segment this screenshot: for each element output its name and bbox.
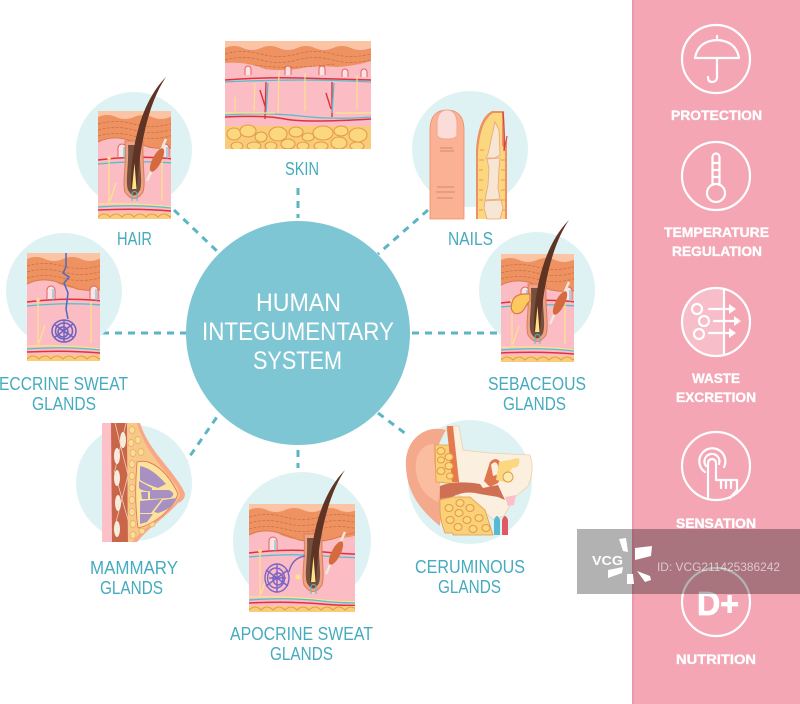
- icon: waste excretion: [682, 288, 750, 356]
- connector dashes: [102, 188, 497, 468]
- panel: skin: [225, 41, 371, 179]
- panel: sebaceous glands: SEBACEOUS: [488, 374, 586, 394]
- central circle: human integumentary system: [186, 221, 410, 445]
- panel: nails: NAILS: [448, 229, 493, 249]
- icon: protection umbrella: [682, 25, 750, 93]
- central circle: human integumentary system: HUMAN: [256, 289, 341, 317]
- label: sensation: SENSATION: [676, 515, 756, 531]
- watermark band: VCG: [592, 553, 623, 568]
- panel: skin: SKIN: [285, 159, 319, 179]
- panel: apocrine sweat glands: APOCRINE SWEAT: [230, 624, 373, 644]
- panel: hair: [76, 77, 192, 245]
- icon: sensation finger: [682, 432, 750, 500]
- panel: mammary glands: GLANDS: [100, 578, 163, 598]
- icon: nutrition D+: D+: [697, 585, 739, 622]
- icon: thermometer: [682, 142, 750, 210]
- label: waste excretion: EXCRETION: [676, 389, 756, 405]
- panel: hair: HAIR: [117, 229, 152, 249]
- panel: ceruminous glands: GLANDS: [438, 577, 501, 597]
- panel: apocrine sweat glands: [230, 470, 373, 660]
- panel: functions sidebar: [632, 0, 800, 704]
- panel: ceruminous glands: CERUMINOUS: [415, 557, 525, 577]
- panel: mammary glands: MAMMARY: [90, 558, 178, 578]
- label: temperature regulation: REGULATION: [672, 243, 762, 259]
- label: protection: PROTECTION: [671, 107, 762, 123]
- panel: sebaceous glands: [479, 220, 595, 410]
- panel: ceruminous glands: [406, 420, 532, 597]
- panel: nails: [412, 91, 528, 249]
- label: temperature regulation: TEMPERATURE: [664, 224, 769, 240]
- panel: eccrine sweat glands: [0, 233, 128, 410]
- central circle: human integumentary system: INTEGUMENTARY: [202, 318, 394, 346]
- watermark band: [577, 529, 800, 594]
- label: waste excretion: [676, 370, 756, 405]
- panel: mammary glands: [76, 423, 192, 598]
- label: waste excretion: WASTE: [692, 370, 740, 386]
- watermark band: ID: VCG211425386242: [657, 562, 780, 574]
- central circle: human integumentary system: SYSTEM: [253, 347, 342, 375]
- panel: eccrine sweat glands: GLANDS: [32, 394, 96, 414]
- panel: sebaceous glands: GLANDS: [503, 394, 566, 414]
- icon: nutrition D+: [682, 568, 750, 636]
- label: temperature regulation: [664, 224, 769, 259]
- label: nutrition: NUTRITION: [676, 651, 756, 667]
- panel: apocrine sweat glands: GLANDS: [270, 644, 333, 664]
- panel: eccrine sweat glands: ECCRINE SWEAT: [0, 374, 128, 394]
